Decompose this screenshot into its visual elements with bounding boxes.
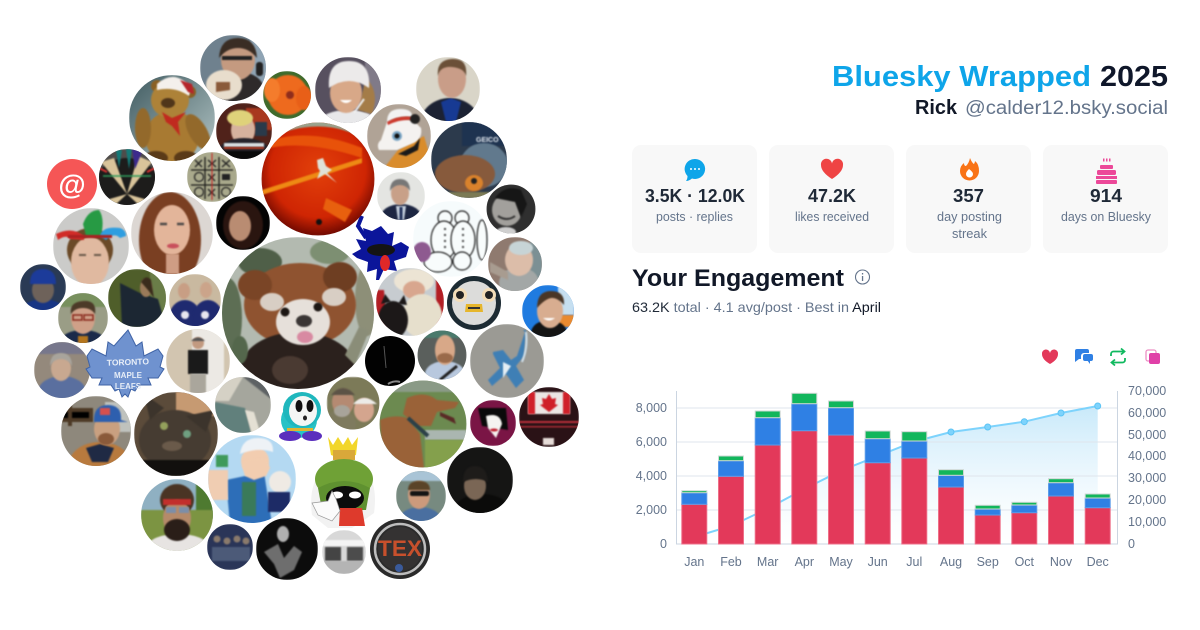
axes	[676, 391, 1118, 544]
panel: days on Bluesky	[1043, 145, 1168, 253]
avatar: smiling man on blue	[522, 285, 574, 337]
avatar: canadian flag arena	[519, 387, 579, 447]
month labels: May	[829, 555, 854, 569]
stat label: day posting	[937, 210, 1002, 224]
avatar: bear balloon: GEICO	[476, 137, 499, 144]
heading: your engagement: Your Engagement	[632, 265, 844, 292]
avatar: mention badge	[47, 159, 97, 209]
avatar: black and white woman	[256, 518, 318, 580]
avatar: bald man	[418, 330, 466, 380]
right axis labels: 40,000	[1128, 449, 1166, 463]
icon: legend replies	[1075, 349, 1093, 364]
engagement summary: 63.2K total · 4.1 avg/post · Best in April	[632, 299, 881, 315]
avatar: red panda	[214, 237, 379, 408]
stat value: 914	[1090, 186, 1122, 206]
avatar: toronto maple leafs logo: LEAFS	[115, 382, 142, 391]
avatar: red haired woman	[131, 192, 213, 274]
panel: day posting streak	[906, 145, 1031, 253]
avatar: shy guy	[279, 392, 322, 441]
icon: chat bubble	[685, 159, 705, 181]
right axis labels	[1128, 384, 1166, 551]
stat label: likes received	[795, 210, 869, 224]
icon: info	[856, 270, 870, 284]
avatar: blue helmet player	[20, 264, 66, 310]
month labels: Sep	[977, 555, 999, 569]
right axis labels: 70,000	[1128, 384, 1166, 398]
month labels: Jun	[868, 555, 888, 569]
avatar: moon creature	[447, 276, 501, 330]
title: 2025	[1100, 61, 1168, 93]
avatar: teddy bear	[129, 75, 216, 165]
avatar: grey landscape	[215, 377, 271, 434]
month labels: Jan	[684, 555, 704, 569]
stat label: streak	[952, 227, 988, 241]
area under cumulative line	[694, 406, 1098, 544]
right axis labels: 60,000	[1128, 406, 1166, 420]
month labels: Mar	[757, 555, 778, 569]
avatar: group photo	[207, 524, 253, 570]
avatar: blue jay	[470, 324, 544, 398]
avatar: mention badge: @	[58, 169, 86, 200]
avatar: toronto maple leafs logo	[86, 330, 164, 397]
left axis labels: 2,000	[636, 503, 667, 517]
legend	[1042, 348, 1160, 366]
cumulative line	[694, 403, 1101, 537]
avatar: hockey player	[315, 57, 381, 123]
avatar: person in forest	[108, 269, 166, 327]
avatar: snowmen cartoon	[413, 201, 489, 277]
icon: legend likes	[1042, 349, 1058, 364]
stat label: posts · replies	[656, 210, 733, 224]
grid lines	[676, 408, 1118, 510]
avatar: toronto maple leafs logo: MAPLE	[114, 371, 143, 380]
avatar: man in dark suit	[377, 172, 425, 220]
avatar: grocery storefront	[322, 530, 366, 574]
user name and handle: @calder12.bsky.social	[965, 98, 1168, 119]
month labels: Apr	[795, 555, 814, 569]
avatar: brown dog	[379, 380, 467, 468]
icon: flame	[960, 158, 979, 180]
avatar: dartboard	[99, 149, 155, 205]
avatar: bear balloon	[431, 122, 508, 198]
avatar: man with red glasses	[58, 293, 108, 343]
combo chart	[636, 384, 1166, 569]
avatar: man on webcam	[34, 342, 90, 398]
left axis labels: 6,000	[636, 435, 667, 449]
icon: heart	[821, 159, 843, 179]
avatar: maple leaf mascot	[352, 216, 409, 280]
avatar: retro illustration	[470, 400, 516, 446]
left axis labels: 8,000	[636, 401, 667, 415]
right axis labels: 20,000	[1128, 493, 1166, 507]
icon: cake	[1096, 158, 1117, 184]
left axis labels	[636, 401, 667, 551]
month labels	[684, 555, 1109, 569]
month labels: Nov	[1050, 555, 1073, 569]
avatar: black silhouette	[365, 336, 415, 386]
avatar: toronto maple leafs logo: TORONTO	[107, 356, 150, 368]
icon: legend reposts	[1111, 348, 1125, 366]
month labels: Feb	[720, 555, 742, 569]
avatar: opossum in cap	[367, 104, 431, 170]
icon: legend quotes	[1146, 350, 1160, 364]
avatar: marvin the martian	[311, 437, 375, 528]
user name and handle: Rick	[915, 97, 958, 119]
avatar: mirror selfie	[166, 329, 230, 394]
avatar: dark haired woman	[216, 196, 270, 250]
panel: posts and replies	[632, 145, 757, 253]
avatar cluster	[20, 35, 579, 580]
avatar: man in suit	[416, 57, 480, 121]
avatar: man in dark night	[447, 447, 513, 513]
panel: likes received	[769, 145, 894, 253]
avatar: big red hockey	[261, 120, 375, 236]
avatar: santa and cat	[376, 268, 444, 339]
left axis labels: 4,000	[636, 469, 667, 483]
avatar: neon tex: TEX	[378, 536, 422, 561]
avatar: tabby cat	[134, 392, 218, 476]
stat label: days on Bluesky	[1061, 210, 1152, 224]
avatar: man with jester hat	[53, 208, 129, 287]
right axis labels: 0	[1128, 537, 1135, 551]
left axis labels: 0	[660, 537, 667, 551]
stacked bars	[682, 393, 1110, 544]
right axis labels: 10,000	[1128, 515, 1166, 529]
avatar: bearded man	[141, 479, 213, 558]
avatar: man on tv	[216, 103, 272, 159]
stat value: 3.5K · 12.0K	[645, 186, 745, 206]
avatar: man in sunglasses	[396, 471, 446, 521]
avatar: black and white portrait	[486, 184, 536, 237]
avatar: couple	[326, 376, 380, 430]
avatar: trainer with bear	[208, 435, 296, 524]
month labels: Aug	[940, 555, 962, 569]
right axis labels: 30,000	[1128, 471, 1166, 485]
month labels: Oct	[1015, 555, 1035, 569]
avatar: baby	[488, 237, 542, 291]
avatar: man in blue cap	[61, 396, 131, 466]
avatar: two hockey players	[169, 274, 221, 326]
avatar: neon tex	[370, 519, 430, 579]
month labels: Jul	[906, 555, 922, 569]
avatar: orange flower	[263, 71, 312, 119]
stat value: 357	[953, 186, 984, 206]
title: Bluesky Wrapped	[832, 61, 1091, 93]
month labels: Dec	[1087, 555, 1109, 569]
stat label	[937, 210, 1002, 241]
right axis labels: 50,000	[1128, 428, 1166, 442]
stat value: 47.2K	[808, 186, 856, 206]
avatar: tic tac toe	[187, 152, 237, 202]
avatar: man with mug	[200, 35, 266, 108]
